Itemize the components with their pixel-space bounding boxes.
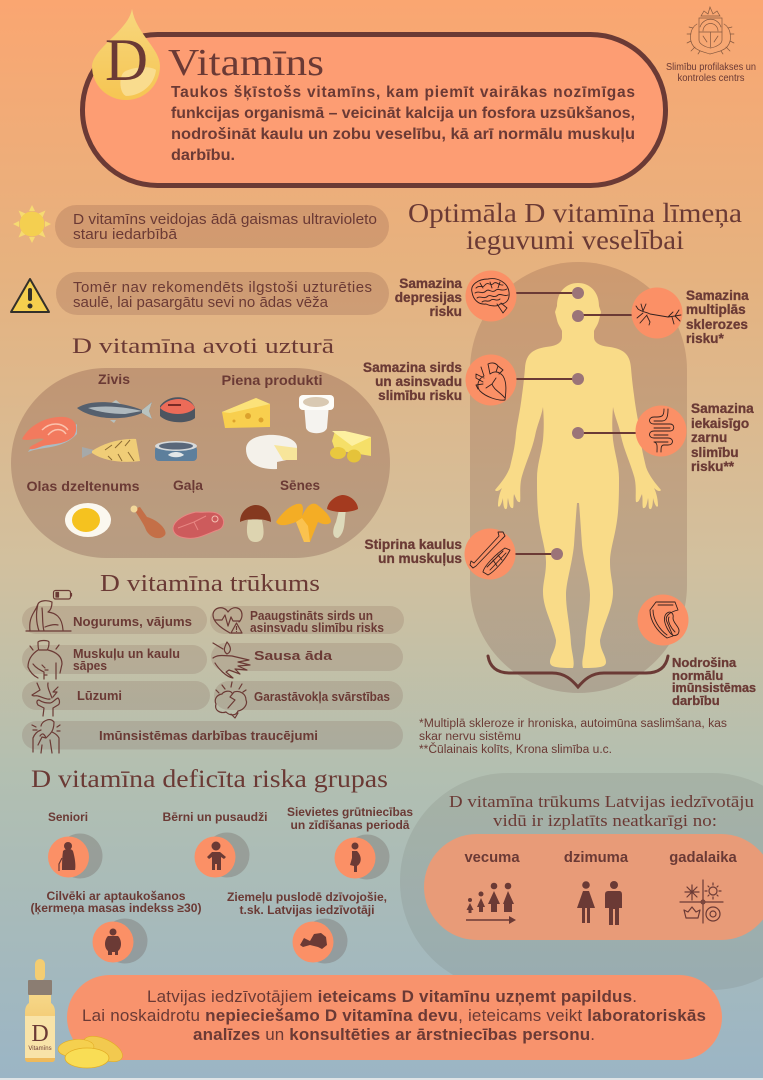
heading: benefits: Optimāla D vitamīna līmeņa [408, 197, 742, 228]
heading: deficiency: D vitamīna trūkums [100, 570, 320, 597]
labels: right benefits: normālu [672, 668, 723, 683]
risk group labels: (ķermeņa masas indekss ≥30) [30, 901, 202, 915]
prevalence heading [449, 792, 754, 830]
symptom labels: Paaugstināts sirds un [250, 609, 373, 623]
food labels [26, 371, 322, 494]
risk group labels: un zīdīšanas periodā [290, 818, 410, 832]
prevalence heading: vidū ir izplatīts neatkarīgi no: [493, 811, 717, 830]
footnotes: skar nervu sistēmu [419, 731, 521, 743]
icon: vitamin bottle: D [31, 1021, 49, 1047]
icon: vitamin bottle [25, 959, 55, 1062]
icon: neuron [632, 288, 682, 338]
icon: heart [466, 354, 516, 406]
intro text: funkcijas organismā – veicināt kalcija un fosfora uzsūkšanos, [171, 105, 635, 122]
labels: left benefits: un asinsvadu [375, 374, 462, 389]
prevalence heading: D vitamīna trūkums Latvijas iedzīvotāju [449, 792, 754, 811]
icon: bone and muscle [464, 528, 516, 580]
icon: capsules [57, 1031, 126, 1068]
heading: benefits: ieguvumi veselībai [466, 224, 684, 255]
panel: recommendation [67, 975, 722, 1060]
icon: forest mushroom [327, 495, 358, 538]
icon: sardine [77, 400, 152, 423]
labels: left benefits: un muskuļus [378, 551, 462, 566]
labels: right benefits: Samazina [686, 288, 749, 303]
icon: obese person [92, 918, 148, 964]
icon: brain [466, 270, 516, 322]
icon: tin can [155, 441, 197, 461]
risk group labels: t.sk. Latvijas iedzīvotāji [240, 903, 374, 917]
labels: right benefits: risku** [691, 459, 735, 474]
callout: sun warning [56, 272, 389, 315]
icon: mood brain [215, 682, 247, 718]
footnotes: *Multiplā skleroze ir hroniska, autoimūna saslimšana, kas [419, 718, 727, 730]
panel: deficiency symptoms [22, 590, 404, 753]
icon: seasons [680, 880, 723, 923]
symptom labels: Garastāvokļa svārstības [254, 689, 390, 704]
panel: prevalence [400, 773, 763, 990]
food labels: Sēnes [280, 477, 320, 493]
heading: risk groups: D vitamīna deficīta riska grupas [31, 766, 388, 793]
food labels: Zivis [98, 371, 130, 387]
symptom labels: Sausa āda [254, 648, 333, 663]
icon: salmon steak [22, 417, 77, 452]
footnotes [419, 718, 727, 756]
heading: benefits [408, 197, 742, 255]
food labels: Piena produkti [222, 372, 322, 388]
labels: right benefits: sklerozes [686, 317, 748, 332]
labels: left benefits: slimību risku [378, 388, 462, 403]
labels: right benefits: multiplās [686, 302, 746, 317]
risk group labels [30, 805, 413, 917]
icon: intestine [636, 406, 686, 456]
labels: right benefits: Samazina [691, 401, 754, 416]
labels: left benefits [363, 276, 462, 566]
icon: chicken leg [130, 506, 166, 538]
symptom labels: sāpes [73, 658, 107, 673]
callout: sun warning: Tomēr nav rekomendēts ilgstoši uzturēties [73, 279, 372, 296]
icon: butter [330, 431, 371, 462]
risk group labels: Ziemeļu puslodē dzīvojošie, [227, 890, 387, 904]
logo: coat of arms and organisation: kontroles centrs [678, 72, 744, 84]
panel: recommendation: analīzes un konsultēties ar ārstniecības personu. [193, 1025, 595, 1044]
labels: left benefits: Samazina [399, 276, 462, 291]
icon: oil drop [92, 9, 160, 100]
symptom labels [73, 609, 390, 743]
icon: dry skin hand [213, 642, 250, 678]
prevalence pill [424, 834, 763, 940]
panel: recommendation: Latvijas iedzīvotājiem ieteicams D vitamīnu uzņemt papildus. [147, 987, 637, 1006]
icon: cheese wedge [222, 398, 270, 428]
panel: recommendation: Lai noskaidrotu nepieciešamo D vitamīna devu, ieteicams veikt laboratoriskās [82, 1006, 706, 1025]
callout: ultraviolet [55, 205, 389, 248]
icon: smoked fillet [82, 439, 140, 462]
symptom labels: asinsvadu slimību risks [250, 621, 384, 635]
labels: left benefits: depresijas [395, 290, 462, 305]
icon: Latvia map [292, 918, 348, 964]
icon: sun [13, 205, 51, 243]
icon: broken bone [32, 683, 60, 716]
callout: ultraviolet: D vitamīns veidojas ādā gaismas ultravioleto [73, 211, 377, 228]
food labels: Olas dzeltenums [26, 478, 140, 494]
icon: pregnant woman [334, 834, 390, 880]
pill labels [464, 850, 737, 866]
title: Vitamīns [168, 42, 324, 84]
title panel [82, 9, 666, 186]
icon: steak [173, 512, 224, 538]
symptom labels: Imūnsistēmas darbības traucējumi [99, 728, 318, 743]
labels: left benefits: risku [430, 304, 462, 319]
pill labels: dzimuma [564, 850, 629, 866]
labels: right benefits: slimību [691, 445, 739, 460]
labels: right benefits [672, 288, 756, 708]
pill labels: vecuma [464, 850, 520, 866]
icon: heart with warning [213, 608, 242, 633]
risk group labels: Bērni un pusaudži [162, 810, 268, 824]
icon: senior [48, 834, 102, 878]
labels: right benefits: iekaisīgo [691, 416, 749, 431]
labels: right benefits: imūnsistēmas [672, 680, 756, 695]
intro text: nodrošināt kaulu un zobu veselību, kā arī normālu muskuļu [171, 126, 635, 143]
risk group labels: Cilvēki ar aptaukošanos [46, 889, 186, 903]
icon: muscle pain [28, 640, 62, 679]
icon: salmon cut [160, 397, 195, 422]
labels: right benefits: zarnu [691, 430, 727, 445]
icon: vitamin bottle: Vitamīns [28, 1046, 52, 1052]
human body [495, 283, 661, 668]
icon: tired person [26, 590, 72, 631]
labels: right benefits: darbību [672, 693, 720, 708]
callout: ultraviolet: staru iedarbībā [73, 226, 178, 243]
intro text: darbību. [171, 147, 235, 164]
labels: right benefits: risku* [686, 331, 724, 346]
symptom labels: Muskuļu un kaulu [73, 646, 180, 661]
icon: ages [466, 883, 516, 924]
footnotes: **Čūlainais kolīts, Krona slimība u.c. [419, 743, 612, 756]
pill labels: gadalaika [669, 850, 737, 866]
heading: food sources: D vitamīna avoti uzturā [72, 333, 334, 358]
risk group labels: Seniori [48, 810, 88, 824]
icon: genders [577, 881, 622, 925]
logo: coat of arms and organisation [666, 7, 756, 84]
icon: brie [246, 435, 297, 469]
title letter D: D [105, 27, 148, 93]
intro text [171, 84, 635, 164]
connectors and dots [515, 287, 636, 560]
icon: yogurt [299, 395, 334, 433]
risk group labels: Sievietes grūtniecības [287, 805, 413, 819]
panel: body benefits [464, 262, 688, 693]
symptom labels: Nogurums, vājums [73, 614, 192, 629]
icon: warning [11, 279, 49, 312]
intro text: Taukos šķīstošs vitamīns, kam piemīt vairākas nozīmīgas [171, 84, 635, 101]
labels: left benefits: Stiprina kaulus [365, 537, 462, 552]
brace [488, 656, 668, 687]
food labels: Gaļa [173, 477, 203, 493]
icon: chanterelles [276, 504, 331, 542]
icon: child [194, 832, 250, 878]
icon: egg [65, 503, 111, 537]
symptom labels: Lūzumi [77, 688, 122, 703]
callout: sun warning: saulē, lai pasargātu sevi no ādas vēža [73, 294, 329, 311]
panel: risk groups [30, 805, 413, 964]
labels: right benefits: Nodrošina [672, 655, 737, 670]
panel: food sources [11, 368, 390, 558]
icon: porcini mushroom [240, 505, 271, 542]
icon: sick person [32, 720, 60, 753]
labels: left benefits: Samazina sirds [363, 360, 462, 375]
icon: shield and bacterium [638, 594, 688, 646]
